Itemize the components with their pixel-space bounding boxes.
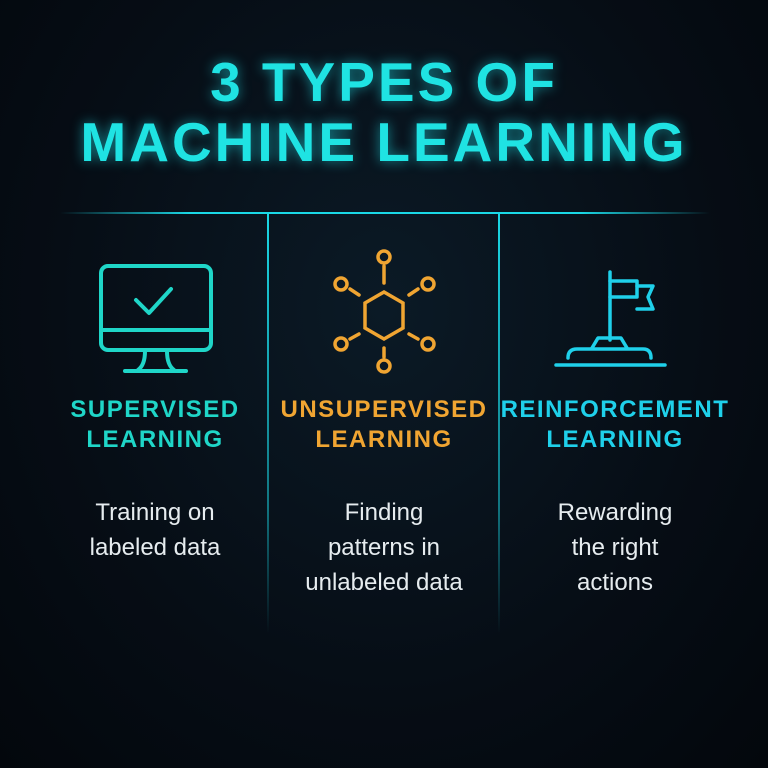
column: reinforcement: Rewarding — [558, 499, 672, 526]
column: reinforcement: the right — [572, 534, 658, 561]
column: supervised: SUPERVISED — [70, 396, 240, 423]
column: reinforcement: LEARNING — [546, 426, 684, 453]
title — [76, 51, 689, 173]
icon: hexagon network — [333, 249, 436, 374]
column: reinforcement — [501, 396, 729, 596]
title: 3 TYPES OF — [210, 51, 558, 113]
column: reinforcement: REINFORCEMENT — [501, 396, 729, 423]
column: supervised: labeled data — [90, 534, 220, 561]
column: unsupervised: Finding — [345, 499, 423, 526]
column: supervised: LEARNING — [86, 426, 224, 453]
column: unsupervised: unlabeled data — [305, 569, 463, 596]
title: MACHINE LEARNING — [80, 111, 688, 173]
column: reinforcement: actions — [577, 569, 653, 596]
column: unsupervised: UNSUPERVISED — [281, 396, 487, 423]
column: supervised: Training on — [95, 499, 215, 526]
column: supervised — [70, 396, 240, 561]
icon: monitor with checkmark — [99, 264, 213, 373]
column: unsupervised: LEARNING — [315, 426, 453, 453]
column: unsupervised: patterns in — [328, 534, 440, 561]
icon: flag on podium — [554, 270, 667, 367]
column: unsupervised — [281, 396, 487, 596]
